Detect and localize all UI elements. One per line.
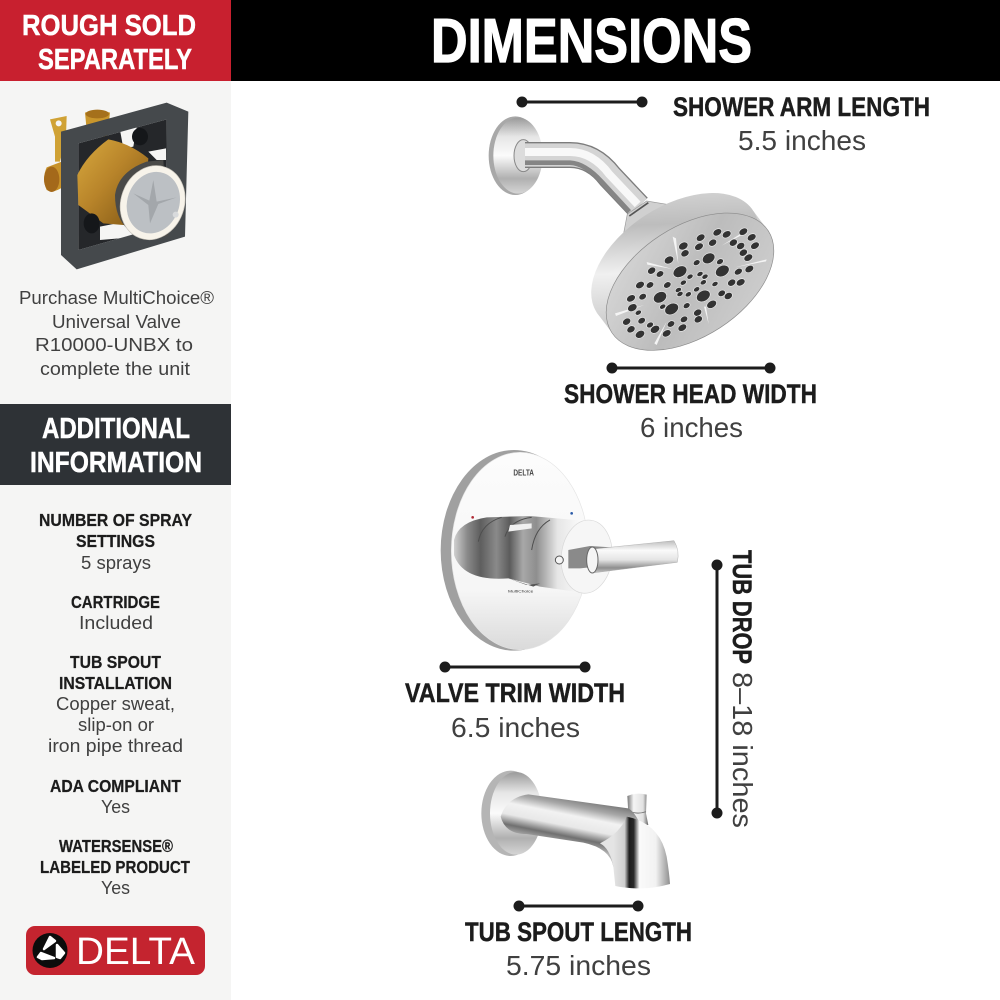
label: valve trim width: 6.5 inches <box>451 712 580 743</box>
spout elbow <box>600 817 670 888</box>
brass pipes behind frame <box>44 110 110 192</box>
logo: delta: DELTA <box>76 931 196 973</box>
arm <box>525 152 638 212</box>
spray nozzles <box>621 226 761 340</box>
spec: ada compliant: ADA COMPLIANT <box>50 776 181 796</box>
spec: tub spout installation <box>48 652 183 756</box>
label: shower head width: 6 inches <box>640 412 743 443</box>
text: purchase multichoice: Purchase MultiChoice® <box>19 288 214 308</box>
label: tub spout length <box>465 917 692 981</box>
text: purchase multichoice: R10000-UNBX to <box>35 335 193 355</box>
handle <box>555 541 678 573</box>
spec: number of spray settings <box>39 510 192 573</box>
logo: delta <box>26 926 205 975</box>
image: shower head and arm <box>489 116 798 379</box>
spec: cartridge: CARTRIDGE <box>71 592 160 612</box>
dimension line: tub drop <box>712 560 722 818</box>
spec: watersense <box>40 836 190 898</box>
spec: tub spout installation: TUB SPOUT <box>70 652 161 672</box>
spec: tub spout installation: INSTALLATION <box>59 673 172 693</box>
frame interior <box>78 119 167 250</box>
spec: number of spray settings: NUMBER OF SPRAY <box>39 510 192 530</box>
dimension line: tub spout <box>514 900 644 912</box>
image: tub spout <box>481 771 670 888</box>
diverter <box>627 794 648 825</box>
banner: dimensions title: DIMENSIONS <box>431 7 752 76</box>
spec: tub spout installation: iron pipe thread <box>48 736 183 756</box>
banner: rough sold separately: SEPARATELY <box>38 44 192 76</box>
text: purchase multichoice <box>19 288 214 379</box>
brass body <box>77 139 148 227</box>
wall flange <box>489 116 543 195</box>
heading: additional information: ADDITIONAL <box>42 413 190 445</box>
image: rough-in valve <box>44 103 195 269</box>
trim plate: MultiChoice <box>508 589 534 594</box>
spec: cartridge: Included <box>79 613 153 633</box>
heading: additional information <box>0 404 231 485</box>
banner: rough sold separately: ROUGH SOLD <box>22 10 196 42</box>
spec: ada compliant: Yes <box>101 797 130 817</box>
frame <box>61 103 188 269</box>
neck <box>623 201 670 239</box>
panel: left sidebar <box>0 0 231 1000</box>
right background <box>231 81 1000 1000</box>
head face <box>582 185 798 379</box>
label: tub spout length: 5.75 inches <box>506 950 651 981</box>
spout flange <box>481 771 542 856</box>
label: shower head width: SHOWER HEAD WIDTH <box>564 379 817 409</box>
text: purchase multichoice: complete the unit <box>40 359 190 379</box>
spec: number of spray settings: 5 sprays <box>81 553 151 573</box>
label: shower arm length: SHOWER ARM LENGTH <box>673 92 930 122</box>
white dial <box>110 156 195 249</box>
spec: number of spray settings: SETTINGS <box>76 531 155 551</box>
label: shower arm length <box>673 92 930 156</box>
label: tub drop: 8–18 inches <box>727 672 758 828</box>
spec: ada compliant <box>50 776 181 817</box>
openings <box>100 127 166 240</box>
banner: rough sold separately <box>0 0 231 81</box>
label: tub spout length: TUB SPOUT LENGTH <box>465 917 692 947</box>
spec: watersense: LABELED PRODUCT <box>40 857 190 877</box>
dimension line: shower head <box>606 362 776 374</box>
label: shower head width <box>564 379 817 443</box>
text: purchase multichoice: Universal Valve <box>52 312 181 332</box>
label: shower arm length: 5.5 inches <box>738 125 866 156</box>
image: valve trim <box>441 450 678 651</box>
heading: additional information: INFORMATION <box>30 447 202 479</box>
trim plate <box>441 450 589 651</box>
spout pipe <box>501 794 647 867</box>
spec: watersense: WATERSENSE® <box>59 836 173 856</box>
cylinder <box>454 516 587 593</box>
spec: cartridge <box>71 592 160 633</box>
spokes <box>615 230 767 345</box>
dark sleeve <box>115 160 168 237</box>
trim plate: DELTA <box>513 468 534 477</box>
dimension line: valve trim <box>440 662 590 672</box>
label: valve trim width <box>405 678 625 743</box>
label: tub drop <box>727 550 758 828</box>
end cap <box>558 518 616 596</box>
label: tub drop: TUB DROP <box>727 550 757 664</box>
head body <box>567 165 783 359</box>
spec: watersense: Yes <box>101 878 130 898</box>
spec: tub spout installation: Copper sweat, <box>56 694 175 714</box>
label: valve trim width: VALVE TRIM WIDTH <box>405 678 625 708</box>
dimension line: shower arm <box>516 96 648 108</box>
banner: dimensions title <box>231 0 1000 81</box>
spec: tub spout installation: slip-on or <box>78 715 154 735</box>
